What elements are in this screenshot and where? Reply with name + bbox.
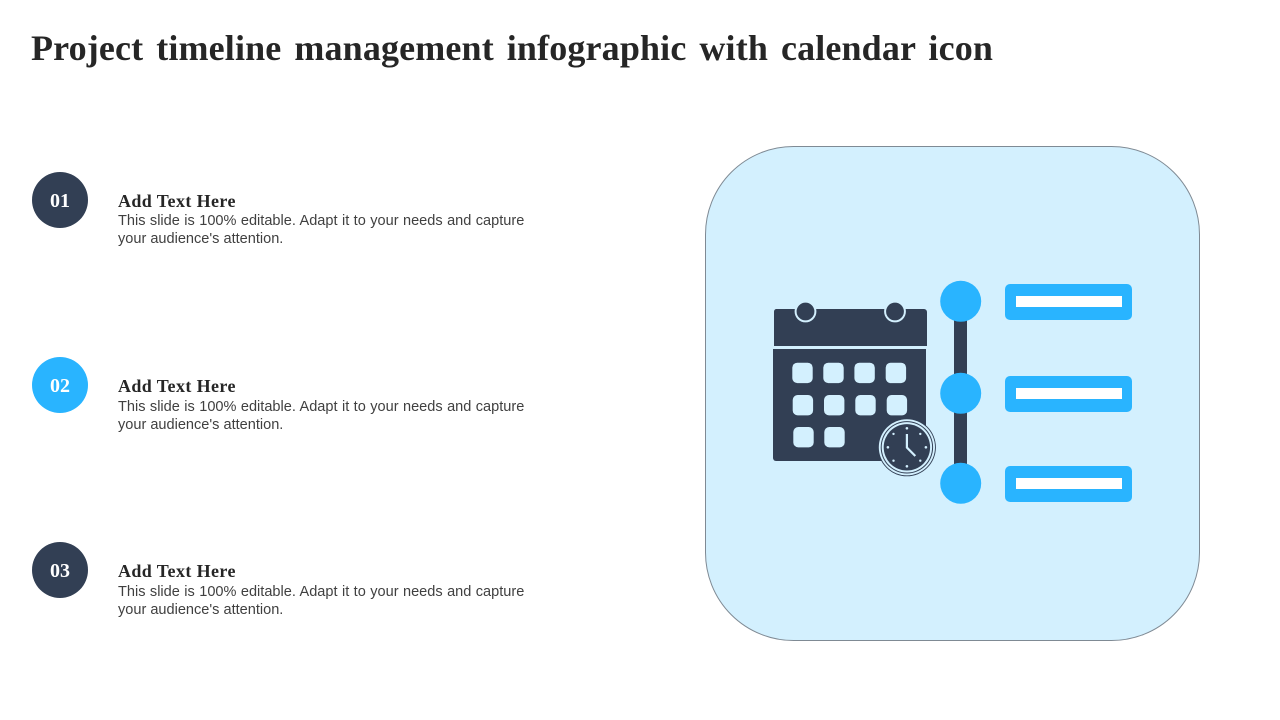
calendar rings [796,302,905,321]
icon: calendar [773,302,936,476]
timeline label 3 [1005,466,1132,502]
calendar date cells [792,363,907,447]
body text 02: your audience's attention. [118,417,283,433]
timeline label 1 [1005,284,1132,320]
heading 01: Add Text Here [118,191,236,211]
body text 01 [118,213,524,247]
heading 03: Add Text Here [118,561,236,581]
list item 01 [32,172,524,247]
body text 02: This slide is 100% editable. Adapt it to your needs and capture [118,399,524,415]
body text 03: This slide is 100% editable. Adapt it to your needs and capture [118,584,524,600]
panel: rounded background [706,146,1200,640]
body text 02 [118,399,524,433]
body text 01: This slide is 100% editable. Adapt it to your needs and capture [118,213,524,229]
list item 03 [32,542,524,618]
icon: clock [878,418,936,476]
timeline node 3 [940,463,981,504]
number badge 02: 02 [50,375,70,397]
body text 01: your audience's attention. [118,231,283,247]
body text 03 [118,584,524,618]
number badge 03: 03 [50,560,70,582]
heading 02: Add Text Here [118,376,236,396]
calendar header [774,309,927,346]
body text 03: your audience's attention. [118,602,283,618]
number badge 01 [32,172,88,228]
number badge 02 [32,357,88,413]
timeline node 2 [940,373,981,414]
list item 02 [32,357,524,433]
timeline label 2 [1005,376,1132,412]
calendar body [773,349,926,461]
number badge 01: 01 [50,190,70,212]
timeline connector [954,301,967,483]
number badge 03 [32,542,88,598]
timeline node 1 [940,281,981,322]
title: Project timeline management infographic with calendar icon [31,28,993,68]
